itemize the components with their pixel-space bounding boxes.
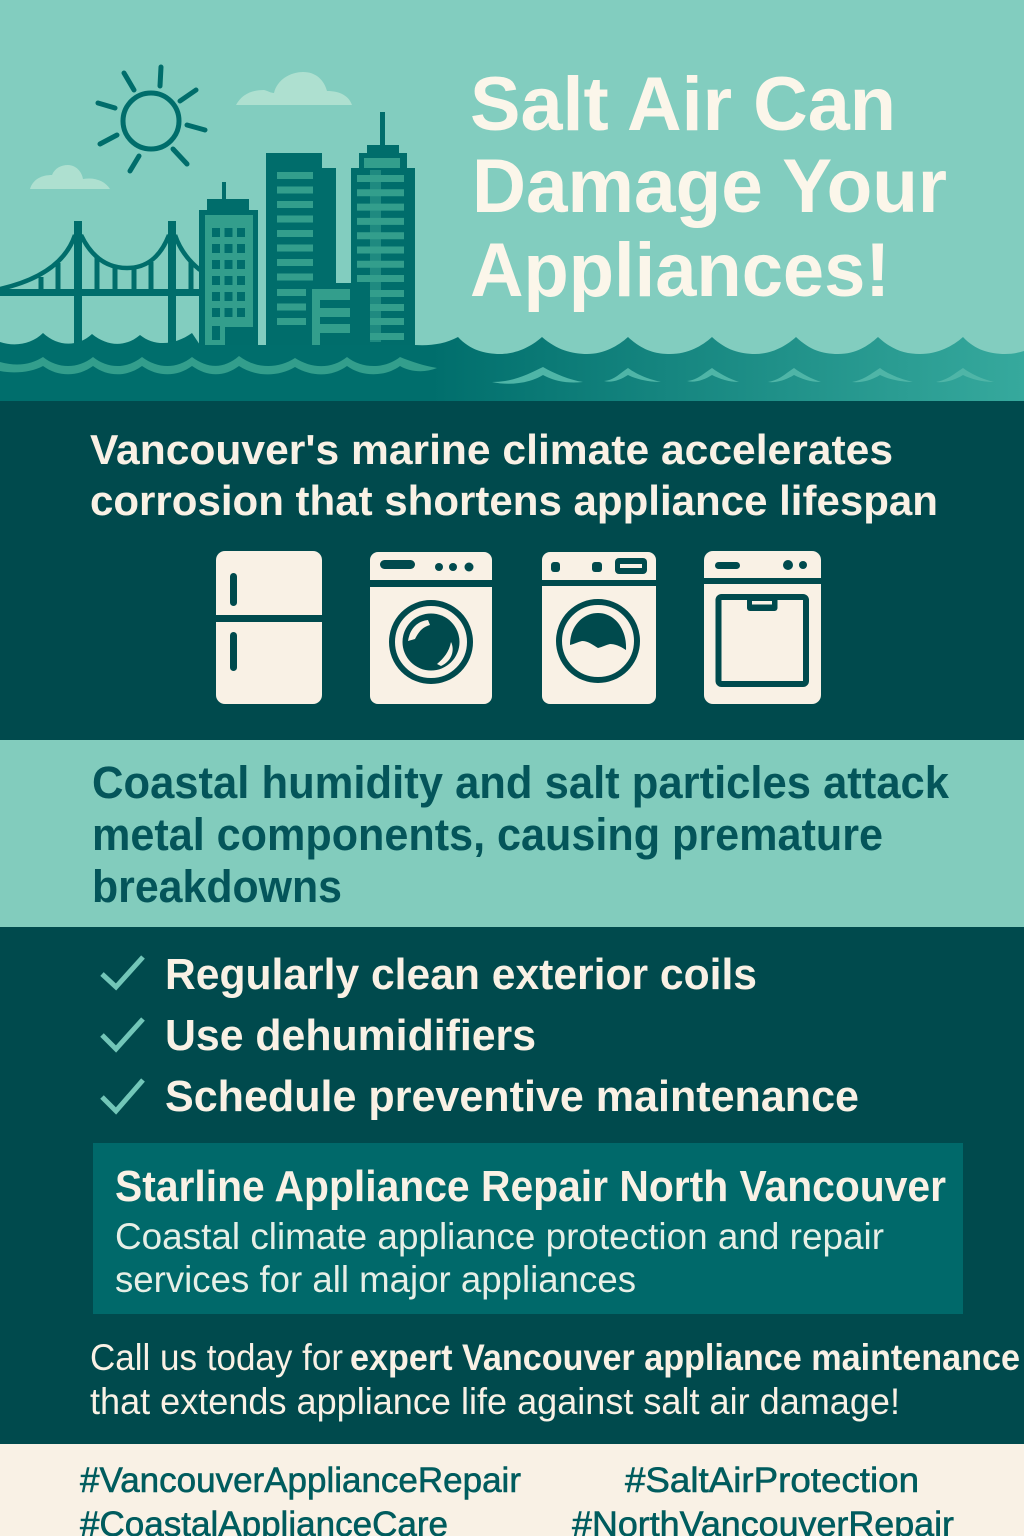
illustration: sea	[0, 333, 1024, 401]
icon: large cloud	[236, 72, 352, 105]
icon: dryer	[542, 552, 656, 704]
subheading	[90, 426, 938, 524]
panel: marine climate	[0, 401, 1024, 740]
subheading: corrosion that shortens appliance lifespan	[90, 477, 938, 524]
item 2: Use dehumidifiers	[165, 1011, 536, 1060]
item 3: Schedule preventive maintenance	[165, 1072, 859, 1121]
title	[470, 62, 947, 313]
illustration: tower B	[266, 153, 352, 347]
text: coastal humidity message: Coastal humidity and salt particles attack	[92, 757, 950, 808]
panel: hashtags	[0, 1444, 1024, 1536]
title: Appliances!	[470, 228, 890, 313]
company name: Starline Appliance Repair North Vancouver	[115, 1162, 946, 1211]
call to action	[90, 1337, 1020, 1422]
text: coastal humidity message	[92, 757, 950, 912]
icon: refrigerator	[216, 551, 322, 704]
subheading: Vancouver's marine climate accelerates	[90, 426, 893, 473]
call to action: Call us today for	[90, 1337, 343, 1378]
panel: prevention and call to action	[0, 927, 1024, 1444]
illustration: left wave band	[0, 356, 437, 374]
icon: check 3	[102, 1080, 143, 1111]
icon: check 1	[102, 957, 143, 987]
illustration: small waves	[492, 367, 994, 384]
company description	[115, 1216, 884, 1300]
icon: sun	[98, 67, 205, 171]
checklist	[102, 950, 859, 1121]
text: coastal humidity message: metal components, causing premature	[92, 809, 883, 860]
title: Damage Your	[472, 144, 947, 229]
hashtag list: #SaltAirProtection	[625, 1461, 919, 1500]
hashtag list	[80, 1461, 954, 1536]
hashtag list: #VancouverApplianceRepair	[80, 1461, 521, 1500]
icon: check 2	[102, 1019, 143, 1049]
item 1: Regularly clean exterior coils	[165, 950, 757, 999]
illustration: suspension bridge	[0, 221, 200, 347]
panel: company box	[93, 1143, 963, 1314]
illustration: tower C	[351, 112, 415, 347]
panel: header scene	[0, 0, 1024, 401]
panel: coastal humidity	[0, 740, 1024, 927]
icon: washing machine	[370, 552, 492, 704]
icon: small cloud	[30, 165, 110, 189]
call to action: that extends appliance life against salt air damage!	[90, 1381, 900, 1422]
text: coastal humidity message: breakdowns	[92, 861, 342, 912]
title: Salt Air Can	[470, 62, 896, 147]
company description: services for all major appliances	[115, 1259, 636, 1300]
illustration: tower A	[199, 182, 258, 347]
icon: dishwasher	[704, 551, 821, 704]
company description: Coastal climate appliance protection and repair	[115, 1216, 884, 1257]
